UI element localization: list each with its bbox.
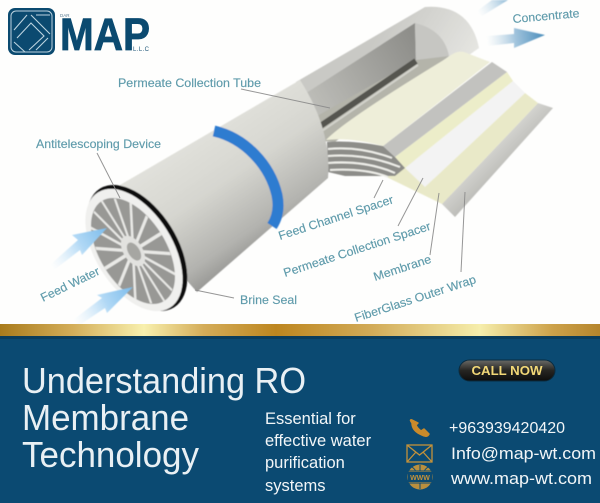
label: Feed Channel Spacer: Feed Channel Spacer xyxy=(277,192,395,243)
cream layer three xyxy=(425,93,538,204)
arrow: concentrate xyxy=(487,28,545,48)
footer panel xyxy=(0,336,600,503)
main heading xyxy=(22,360,306,475)
interior wall xyxy=(300,23,416,124)
logo DAR text: DAR xyxy=(60,13,70,18)
subheading: effective water xyxy=(265,432,372,450)
subheading: Essential for xyxy=(265,410,356,428)
label: Membrane: Membrane xyxy=(372,252,433,284)
main heading: Membrane xyxy=(22,397,189,438)
cream layer two xyxy=(395,72,513,168)
icon: globe xyxy=(408,464,432,490)
logo LLC text: L.L.C xyxy=(133,47,150,53)
call now button xyxy=(459,360,555,381)
text: email: Info@map-wt.com xyxy=(451,445,596,463)
label: Feed Water: Feed Water xyxy=(38,264,102,305)
label: Antitelescoping Device: Antitelescoping Device xyxy=(36,137,161,151)
rear shell of the cylinder xyxy=(296,7,479,150)
label: Brine Seal: Brine Seal xyxy=(240,293,297,307)
logo wordmark: MAP xyxy=(60,9,150,60)
main heading: Understanding RO xyxy=(22,360,306,401)
text: website: www.map-wt.com xyxy=(450,470,592,488)
label: Permeate Collection Tube: Permeate Collection Tube xyxy=(118,76,261,90)
curled layer edges xyxy=(327,142,405,176)
background xyxy=(0,0,600,325)
text: phone number: +963939420420 xyxy=(449,420,565,437)
arrow: feed water lower xyxy=(73,287,133,326)
brine seal xyxy=(66,167,208,329)
icon: globe: WWW xyxy=(410,475,430,482)
end cap wheel xyxy=(74,183,192,319)
interior end wall xyxy=(415,23,449,66)
lower cream sheet under the curl xyxy=(372,160,452,204)
logo xyxy=(8,8,150,60)
gold band xyxy=(0,324,600,336)
arrow: feed water upper xyxy=(50,228,107,270)
label: Permeate Collection Spacer: Permeate Collection Spacer xyxy=(282,219,432,280)
top cream layer xyxy=(326,52,490,146)
label: FiberGlass Outer Wrap: FiberGlass Outer Wrap xyxy=(353,272,478,325)
leader lines xyxy=(97,89,465,298)
blue band xyxy=(214,131,278,226)
icon: phone xyxy=(410,420,429,436)
membrane cutaway illustration xyxy=(65,7,553,329)
main cylinder body xyxy=(108,80,328,292)
end cap rim xyxy=(65,172,203,328)
subheading: purification xyxy=(265,454,345,472)
subheading: systems xyxy=(265,477,326,495)
fiberglass outer wrap layer xyxy=(442,103,553,217)
main heading: Technology xyxy=(22,434,199,475)
subheading xyxy=(265,410,372,495)
label: Concentrate: Concentrate xyxy=(512,6,580,26)
logo emblem xyxy=(8,8,55,55)
call now button: CALL NOW xyxy=(472,363,543,378)
interior floor xyxy=(303,56,449,142)
icon: envelope xyxy=(407,445,432,462)
white membrane layer xyxy=(405,81,525,187)
permeate tube slot xyxy=(316,61,416,129)
mesh spacer layer xyxy=(383,62,507,157)
arrow: top outflow xyxy=(477,0,508,16)
